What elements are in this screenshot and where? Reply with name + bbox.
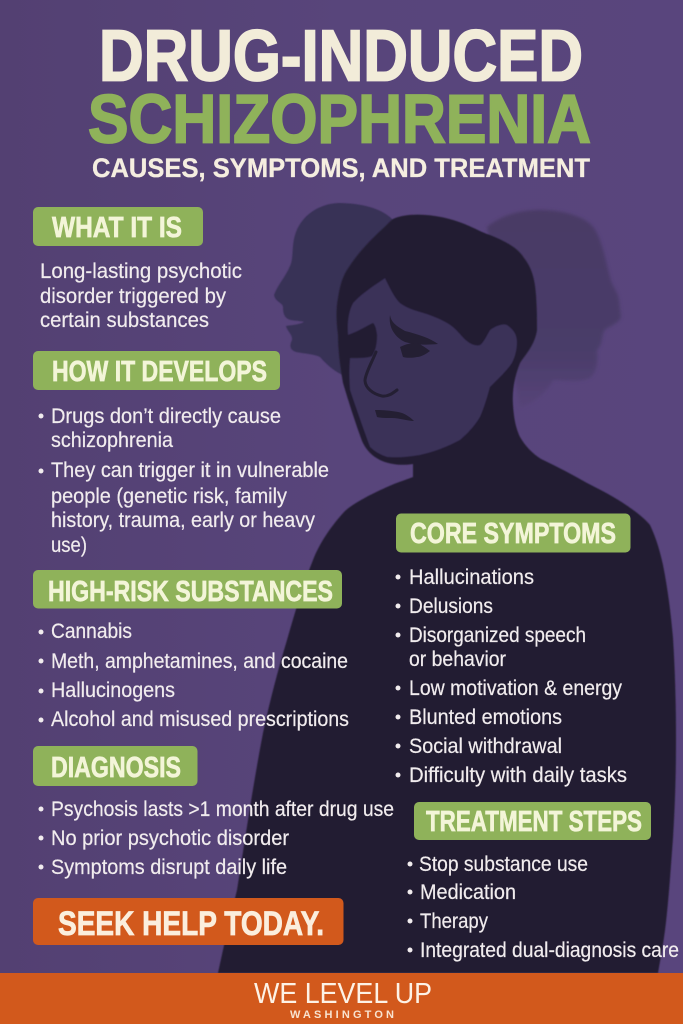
shadow face: left — [274, 203, 393, 376]
footer band: logo: WASHINGTON — [290, 1009, 394, 1021]
list: substances: Alcohol and misused prescriptions — [51, 708, 349, 731]
list: how it develops: history, trauma, early or heavy — [51, 509, 315, 532]
list: substances — [38, 620, 349, 731]
heading: how it develops: HOW IT DEVELOPS — [52, 356, 267, 388]
heading: core symptoms — [396, 514, 630, 552]
footer band: logo — [0, 973, 683, 1024]
list: how it develops: use) — [51, 534, 87, 557]
list: diagnosis criteria: Symptoms disrupt daily life — [51, 856, 287, 879]
list: how it develops — [38, 405, 329, 557]
illustration: silhouette figure with shadow faces — [218, 203, 676, 973]
list: symptoms — [396, 566, 627, 787]
text block: definition: Long-lasting psychotic — [40, 260, 242, 283]
footer band: logo: WE LEVEL UP — [254, 978, 432, 1010]
list: symptoms: Social withdrawal — [409, 735, 562, 758]
heading: diagnosis — [33, 746, 198, 786]
title: SCHIZOPHRENIA — [88, 80, 591, 158]
list: diagnosis criteria — [38, 798, 394, 879]
eye — [400, 343, 430, 358]
title — [88, 16, 591, 183]
title: CAUSES, SYMPTOMS, AND TREATMENT — [92, 153, 590, 183]
list: symptoms: Difficulty with daily tasks — [409, 764, 627, 787]
shadow face: right — [487, 210, 621, 408]
list: treatment: Therapy — [420, 910, 488, 933]
mouth — [375, 410, 414, 421]
title: DRUG-INDUCED — [99, 16, 583, 96]
text block: definition: disorder triggered by — [40, 285, 226, 308]
list: symptoms: or behavior — [409, 648, 506, 671]
panel: core symptoms — [396, 514, 630, 787]
list: how it develops: Drugs don’t directly cause — [51, 405, 281, 428]
text block: definition — [40, 260, 242, 332]
panel: treatment steps — [408, 802, 679, 962]
heading: what it is: WHAT IT IS — [52, 212, 182, 244]
eyebrow — [390, 315, 438, 345]
heading: core symptoms: CORE SYMPTOMS — [410, 518, 616, 550]
face — [348, 278, 517, 457]
list: treatment: Stop substance use — [419, 853, 588, 876]
panel: what it is — [33, 207, 242, 332]
panel: high-risk substances — [33, 570, 349, 731]
list: symptoms: Hallucinations — [409, 566, 534, 589]
list: how it develops: schizophrenia — [51, 429, 173, 452]
list: symptoms: Delusions — [409, 595, 493, 618]
list: substances: Cannabis — [51, 620, 132, 643]
list: symptoms: Blunted emotions — [409, 706, 562, 729]
heading: high-risk substances — [33, 570, 342, 608]
dark body and hair — [218, 215, 676, 973]
list: diagnosis criteria: Psychosis lasts >1 month after drug use — [51, 798, 394, 821]
text block: definition: certain substances — [40, 309, 209, 332]
list: symptoms: Disorganized speech — [409, 624, 586, 647]
list: substances: Hallucinogens — [51, 679, 175, 702]
panel: how it develops — [33, 351, 329, 557]
heading: diagnosis: DIAGNOSIS — [51, 752, 181, 784]
list: diagnosis criteria: No prior psychotic disorder — [51, 827, 289, 850]
heading: high-risk substances: HIGH-RISK SUBSTANCES — [48, 576, 333, 608]
nose line — [365, 352, 397, 396]
heading: how it develops — [33, 351, 280, 390]
list: treatment: Medication — [420, 881, 516, 904]
panel: diagnosis — [33, 746, 394, 879]
list: symptoms: Low motivation & energy — [409, 677, 622, 700]
list: how it develops: They can trigger it in vulnerable — [51, 459, 329, 482]
list: treatment — [408, 853, 679, 962]
callout: seek help today: SEEK HELP TODAY. — [58, 905, 324, 943]
list: substances: Meth, amphetamines, and cocaine — [51, 650, 348, 673]
callout: seek help today — [33, 898, 344, 945]
list: how it develops: people (genetic risk, family — [51, 485, 287, 508]
